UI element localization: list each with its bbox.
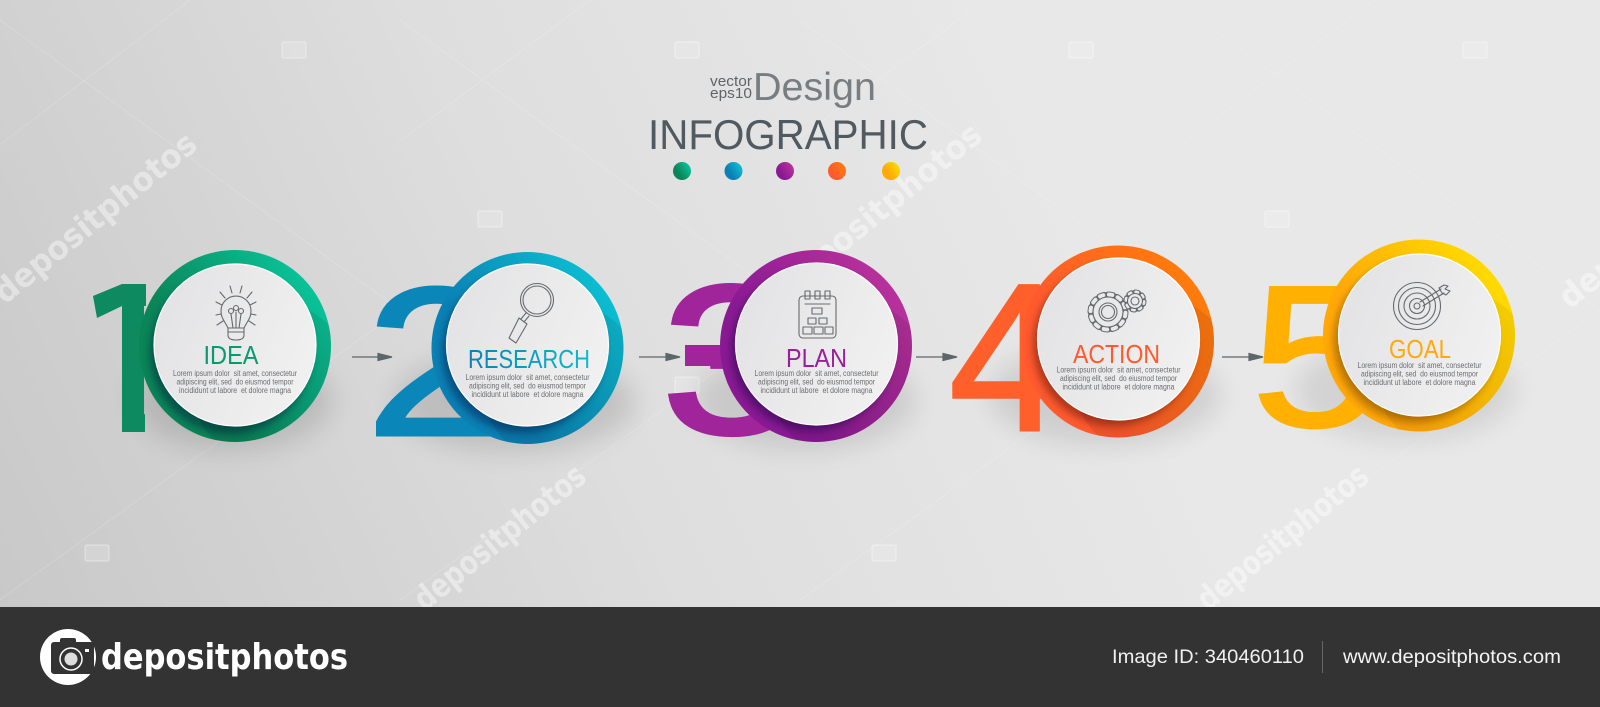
icon: light bulb [216, 286, 256, 340]
watermark text: depositphotos [405, 456, 593, 618]
icon: target [1394, 282, 1450, 330]
digit 1 [93, 284, 146, 432]
body text: incididunt ut labore et dolore magna [760, 386, 873, 395]
ring [720, 250, 912, 442]
title: vector eps10 [710, 73, 752, 102]
body text: adipiscing elit, sed do eiusmod tempor [176, 378, 294, 386]
arrow 2 [639, 354, 680, 360]
body text [1056, 366, 1181, 392]
logo: wordmark: depositphotos [101, 637, 348, 678]
body text: incididunt ut labore et dolore magna [1364, 378, 1476, 387]
icon: gears [1090, 292, 1144, 330]
body text [466, 373, 590, 399]
arrow 1 [352, 354, 392, 360]
footer bar [0, 607, 1600, 707]
label: GOAL [1389, 334, 1451, 364]
body text: incididunt ut labore et dolore magna [1062, 382, 1175, 392]
step 5: goal [1258, 240, 1516, 444]
label: PLAN [786, 343, 847, 373]
step 4: action [952, 246, 1222, 450]
digit 4: 4 [949, 241, 1065, 475]
digit 1: 1 [70, 240, 188, 477]
step 2: research [376, 252, 638, 458]
body text: adipiscing elit, sed do eiusmod tempor [758, 378, 875, 386]
label: ACTION [1073, 339, 1160, 369]
colour dots [673, 162, 900, 180]
body text [754, 369, 879, 395]
title: Design: Design [753, 66, 876, 109]
logo: camera icon [40, 629, 96, 685]
body text: incididunt ut labore et dolore magna [179, 386, 291, 395]
body text: Lorem ipsum dolor sit amet, consectetur [173, 369, 297, 378]
body text: incididunt ut labore et dolore magna [472, 390, 584, 399]
disc [1038, 258, 1200, 420]
label: RESEARCH [468, 344, 590, 374]
title: INFOGRAPHIC: INFOGRAPHIC [648, 111, 928, 158]
label: IDEA [204, 340, 259, 370]
body text [1358, 361, 1482, 387]
body text: adipiscing elit, sed do eiusmod tempor [1060, 374, 1177, 383]
arrow 3 [916, 354, 957, 360]
body text: adipiscing elit, sed do eiusmod tempor [1361, 370, 1478, 378]
digit 2: 2 [365, 243, 506, 480]
disc [154, 264, 316, 426]
arrow 4 [1222, 354, 1263, 360]
watermark text: depositphotos [1188, 456, 1376, 618]
title: vector eps10: eps10 [710, 85, 752, 102]
ring [139, 250, 331, 442]
step 3: plan [668, 250, 918, 454]
ring [432, 252, 624, 444]
title: vector eps10: vector [710, 73, 752, 90]
body text: Lorem ipsum dolor sit amet, consectetur [754, 369, 879, 378]
watermark text [0, 115, 1600, 618]
body text: Lorem ipsum dolor sit amet, consectetur [1358, 361, 1482, 370]
disc [1338, 254, 1500, 416]
watermark text: depositphotos [770, 115, 989, 302]
ring [1323, 240, 1515, 432]
step 1: idea [93, 250, 336, 456]
body text: adipiscing elit, sed do eiusmod tempor [469, 382, 586, 390]
body text [173, 369, 297, 395]
body text: Lorem ipsum dolor sit amet, consectetur [1056, 366, 1181, 374]
ring [1022, 246, 1214, 438]
digit 3: 3 [661, 241, 802, 478]
icon: calendar [799, 291, 836, 338]
site url: www.depositphotos.com [1342, 647, 1561, 668]
image id: Image ID: 340460110 [1112, 647, 1304, 668]
digit 5: 5 [1251, 244, 1383, 469]
disc [736, 263, 898, 425]
body text: Lorem ipsum dolor sit amet, consectetur [466, 373, 590, 382]
icon: magnifier [509, 284, 554, 343]
disc [446, 264, 608, 426]
